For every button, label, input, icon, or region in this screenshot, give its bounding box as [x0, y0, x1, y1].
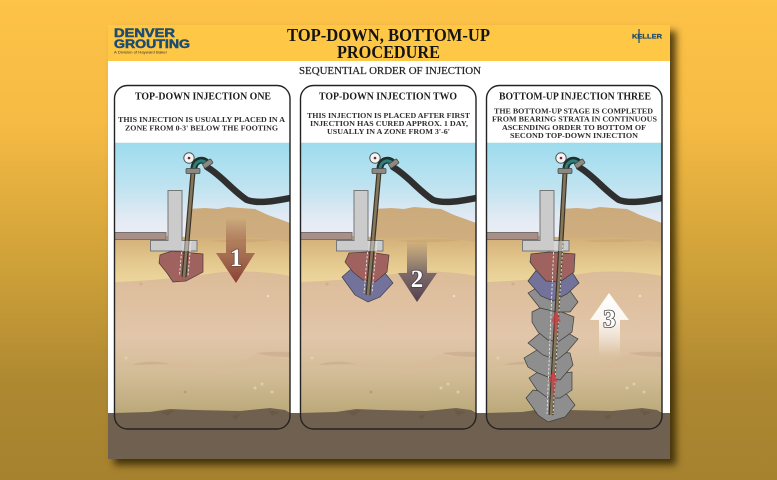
title: PROCEDURE: [337, 42, 440, 62]
panel description two: INJECTION HAS CURED APPROX. 1 DAY,: [310, 119, 468, 128]
panel description three: SECOND TOP-DOWN INJECTION: [510, 131, 639, 140]
title: [287, 25, 490, 62]
gauge and hose two: [370, 153, 476, 202]
logo: Denver Grouting: A Division of Hayward Baker: [114, 50, 168, 54]
logo: Keller: KELLER: [632, 33, 662, 40]
logo: Denver Grouting: DENVER: [114, 28, 176, 40]
yellow header band: [108, 25, 670, 61]
gauge and hose three: [556, 153, 662, 202]
injection pipe two: [364, 172, 379, 295]
panel description one: [118, 115, 286, 132]
soil and footing scene one: [114, 142, 290, 430]
title: TOP-DOWN, BOTTOM-UP: [287, 25, 490, 45]
subtitle: SEQUENTIAL ORDER OF INJECTION: [299, 65, 481, 77]
panel description three: THE BOTTOM-UP STAGE IS COMPLETED: [494, 106, 654, 116]
panel border one: [114, 86, 290, 429]
soil and footing scene two: [300, 142, 476, 430]
panel: top-down injection two: [300, 86, 476, 430]
arrow: down 2: [398, 240, 437, 302]
soil and footing scene three: [486, 142, 662, 430]
ground band: [108, 413, 670, 459]
arrow: down 2: 2: [411, 266, 423, 293]
panel description three: [492, 106, 657, 140]
injection pipe one: [180, 172, 193, 277]
panel border three: [486, 86, 662, 429]
logo: Denver Grouting: [114, 28, 190, 54]
arrow: down 1: [216, 218, 255, 283]
panel: bottom-up injection three: [486, 86, 662, 430]
grout zones: first and second injections: [342, 252, 393, 302]
panel: top-down injection one: [114, 86, 290, 430]
arrow: up 3: [590, 293, 629, 356]
red flow arrows: [548, 311, 561, 400]
panel heading two: TOP-DOWN INJECTION TWO: [319, 92, 457, 102]
panel description three: ASCENDING ORDER TO BOTTOM OF: [502, 123, 646, 132]
panel description two: USUALLY IN A ZONE FROM 3'-6': [327, 127, 450, 136]
logo: Keller: [632, 29, 662, 43]
panel heading one: TOP-DOWN INJECTION ONE: [135, 92, 271, 102]
logo: Denver Grouting: GROUTING: [114, 39, 190, 51]
panel description one: THIS INJECTION IS USUALLY PLACED IN A: [118, 115, 286, 124]
panel border two: [300, 86, 476, 429]
arrow: up 3: 3: [603, 306, 616, 333]
grout column: stacked injections: [524, 252, 579, 422]
panel description one: ZONE FROM 0-3' BELOW THE FOOTING: [125, 124, 278, 132]
gauge and hose one: [184, 153, 290, 202]
white sheet body: [108, 61, 670, 413]
panel description two: [307, 111, 470, 136]
injection pipe three: [547, 172, 565, 415]
panel description two: THIS INJECTION IS PLACED AFTER FIRST: [307, 111, 470, 120]
arrow: down 1: 1: [230, 245, 242, 272]
panel description three: FROM BEARING STRATA IN CONTINUOUS: [492, 115, 657, 124]
panel heading three: BOTTOM-UP INJECTION THREE: [499, 92, 651, 102]
grout zone: first injection: [159, 251, 203, 282]
